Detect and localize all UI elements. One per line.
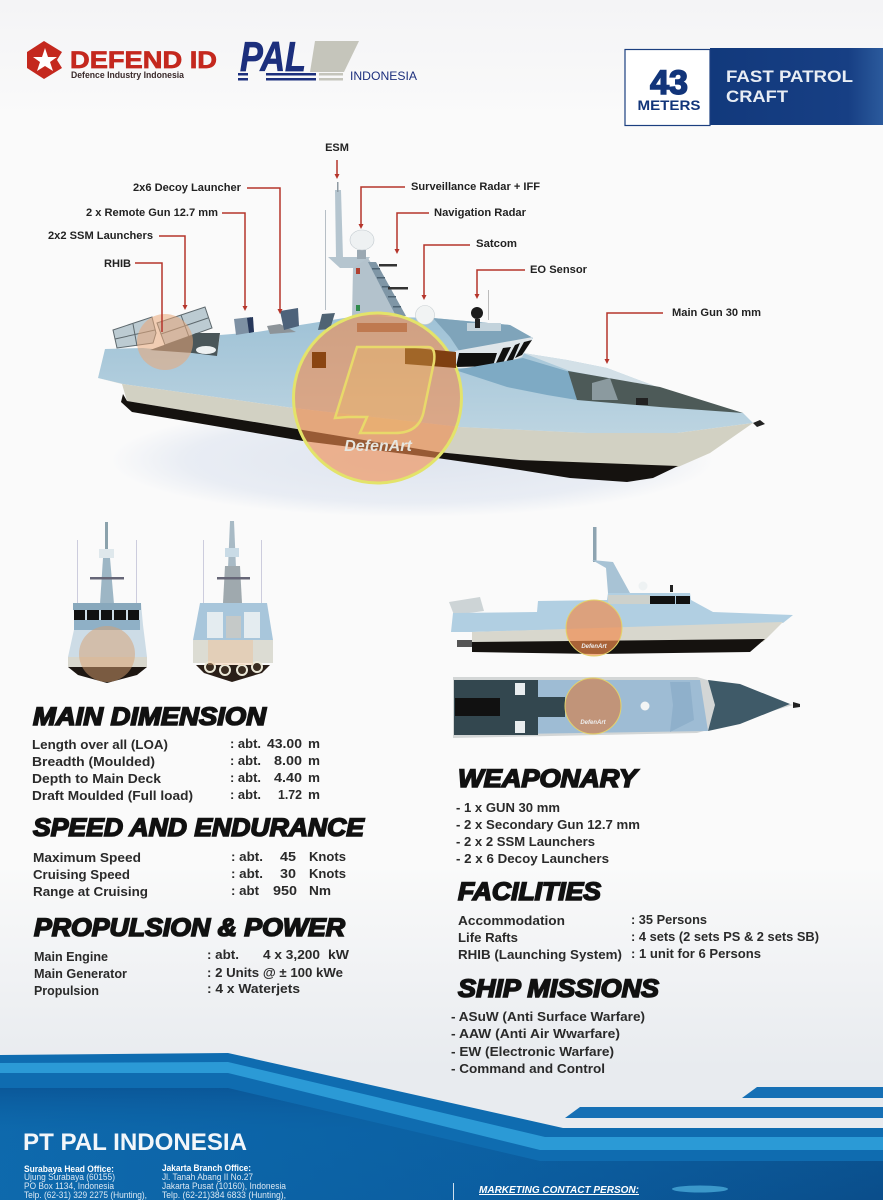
callout: SSM launchers: [48, 230, 188, 310]
facility rows: : 4 sets (2 sets PS & 2 sets SB): [631, 929, 819, 944]
speed rows: : abt: [231, 883, 260, 898]
callout: navigation radar: [394, 207, 527, 254]
dimension rows: [32, 736, 320, 803]
callout: decoy launcher: 2x6 Decoy Launcher: [133, 182, 242, 194]
speed rows: Range at Cruising: [33, 884, 148, 899]
watermark large: DefenArt: [344, 438, 412, 455]
Surabaya office: Telp. (62-31) 329 2275 (Hunting),: [24, 1190, 147, 1200]
heading: PROPULSION & POWER: [34, 914, 345, 942]
dimension rows: m: [308, 736, 320, 751]
bridge windows: [456, 340, 532, 367]
mission rows: - EW (Electronic Warfare): [451, 1044, 614, 1059]
panel: weaponary: [456, 765, 640, 866]
PAL logo lettering: PAL: [240, 33, 306, 80]
callout: main gun: Main Gun 30 mm: [672, 307, 761, 319]
stern RHIB: [196, 346, 216, 354]
dimension rows: : abt.: [230, 736, 261, 751]
propulsion rows: Propulsion: [34, 983, 99, 998]
side view ship: DefenArt: [581, 644, 608, 650]
callout: main gun: [604, 307, 761, 364]
watermark large: [294, 313, 462, 483]
badge number: 43: [650, 64, 688, 102]
dimension rows: 4.40: [274, 770, 302, 785]
callout: EO sensor: EO Sensor: [530, 264, 588, 276]
dimension rows: 1.72: [278, 787, 302, 802]
dimension rows: : abt.: [230, 770, 261, 785]
Jakarta office: [162, 1163, 286, 1200]
footer main panel: [0, 1088, 883, 1200]
footer shading: [0, 1088, 883, 1200]
dimension rows: : abt.: [230, 753, 261, 768]
hull grey band: [98, 378, 753, 467]
bulwark: [523, 353, 660, 388]
bow tip: [753, 420, 765, 427]
footer: [0, 1053, 883, 1200]
heading: SHIP MISSIONS: [458, 975, 659, 1003]
propulsion rows: kW: [328, 947, 350, 962]
Jakarta office: Jakarta Pusat (10160), Indonesia: [162, 1181, 286, 1191]
heading: MAIN DIMENSION: [33, 703, 267, 731]
speed rows: Knots: [309, 866, 346, 881]
stern well: [150, 333, 220, 356]
callout: ESM: [325, 142, 349, 179]
propulsion rows: 4 x 3,200: [263, 947, 320, 962]
callout: RHIB: RHIB: [104, 258, 131, 270]
badge navy panel: [710, 48, 883, 125]
badge title: CRAFT: [726, 87, 789, 106]
badge title: FAST PATROL: [726, 67, 853, 86]
header logos: [27, 33, 417, 83]
panel: main dimension: [32, 703, 320, 803]
radar dome: [350, 230, 374, 250]
top view ship: DefenArt: [580, 720, 607, 726]
EO sensor: [467, 290, 501, 331]
callout: remote gun: [86, 207, 248, 311]
watermark small stern: [137, 314, 193, 370]
speed rows: Nm: [309, 883, 331, 898]
bow main gun: [592, 378, 648, 405]
propulsion rows: Main Engine: [34, 949, 108, 964]
dimension rows: 8.00: [274, 753, 302, 768]
PAL logo grey ship bow: [310, 41, 359, 72]
Jakarta office: Telp. (62-21)384 6833 (Hunting),: [162, 1190, 286, 1200]
facility rows: : 35 Persons: [631, 912, 707, 927]
callout: surveillance radar: Surveillance Radar + IFF: [411, 181, 540, 193]
facility rows: Accommodation: [458, 913, 565, 928]
dimension rows: Breadth (Moulded): [32, 754, 155, 769]
mission rows: - AAW (Anti Air Wwarfare): [451, 1026, 620, 1041]
Jakarta office: Jakarta Branch Office:: [162, 1163, 251, 1173]
weapon rows: [456, 800, 640, 866]
stern launchers: [113, 307, 212, 348]
satcom dome: [416, 306, 434, 324]
weapon rows: - 2 x Secondary Gun 12.7 mm: [456, 817, 640, 832]
marketing contact heading: MARKETING CONTACT PERSON:: [479, 1185, 639, 1196]
weapon rows: - 1 x GUN 30 mm: [456, 800, 560, 815]
speed rows: Knots: [309, 849, 346, 864]
speed rows: 950: [273, 883, 297, 898]
weapon rows: - 2 x 2 SSM Launchers: [456, 834, 595, 849]
speed rows: Cruising Speed: [33, 867, 130, 882]
Surabaya office: Ujung Surabaya (60155): [24, 1172, 115, 1182]
rear view ship: [193, 521, 273, 682]
Jakarta office: Jl. Tanah Abang II No.27: [162, 1172, 253, 1182]
dimension rows: m: [308, 770, 320, 785]
propulsion rows: : 4 x Waterjets: [207, 981, 300, 996]
panel: ship missions: [451, 975, 659, 1076]
callout: satcom: Satcom: [476, 238, 517, 250]
propulsion rows: [34, 947, 350, 998]
callout: satcom: [422, 238, 517, 300]
dimension rows: Length over all (LOA): [32, 737, 168, 752]
bridge window frames: [455, 337, 533, 368]
hull black waterline: [121, 394, 678, 482]
speed rows: Maximum Speed: [33, 850, 141, 865]
heading: FACILITIES: [458, 878, 601, 906]
facility rows: [458, 912, 819, 962]
ship shadow: [110, 403, 714, 517]
front view ship: [68, 522, 147, 683]
icon: Defend ID star logo: [27, 41, 62, 79]
Surabaya office: PO Box 1134, Indonesia: [24, 1181, 114, 1191]
footer wave bands: [0, 1053, 883, 1200]
dimension rows: : abt.: [230, 787, 261, 802]
foredeck: [455, 358, 577, 400]
heading: WEAPONARY: [458, 765, 640, 793]
facility rows: : 1 unit for 6 Persons: [631, 946, 761, 961]
Defend ID wordmark: DEFEND ID: [70, 47, 217, 74]
panel: speed and endurance: [33, 814, 365, 899]
top view ship: [453, 677, 800, 738]
dimension rows: 43.00: [267, 736, 302, 751]
heading: SPEED AND ENDURANCE: [33, 814, 365, 842]
callout: EO sensor: [474, 264, 588, 299]
speed rows: [33, 849, 346, 899]
panel: facilities: [458, 878, 819, 962]
company name: PT PAL INDONESIA: [23, 1129, 247, 1156]
footer accent bars: [565, 1087, 883, 1118]
mission rows: - ASuW (Anti Surface Warfare): [451, 1009, 645, 1024]
propulsion rows: : abt.: [207, 947, 239, 962]
facility rows: Life Rafts: [458, 930, 518, 945]
remote guns and decoy launcher: [234, 308, 335, 335]
bridge wheelhouse roof: [433, 318, 533, 352]
callout: remote gun: 2 x Remote Gun 12.7 mm: [86, 207, 218, 219]
callouts: [48, 142, 761, 364]
PAL logo stripes: [238, 73, 343, 80]
speed rows: : abt.: [231, 866, 263, 881]
side view ship: [449, 527, 793, 656]
Defend ID tagline: Defence Industry Indonesia: [71, 70, 185, 81]
callout: decoy launcher: [133, 182, 282, 314]
dimension rows: m: [308, 753, 320, 768]
mission rows: - Command and Control: [451, 1061, 605, 1076]
hull upper side: [98, 316, 753, 433]
dimension rows: m: [308, 787, 320, 802]
speed rows: 45: [280, 849, 296, 864]
propulsion rows: Main Generator: [34, 966, 127, 981]
callout: RHIB: [104, 258, 162, 332]
PAL Indonesia text: INDONESIA: [350, 69, 417, 83]
mission rows: [451, 1009, 645, 1076]
Surabaya office: Surabaya Head Office:: [24, 1164, 114, 1174]
header badge: 43 meters fast patrol craft: [625, 48, 883, 126]
main ship illustration: [98, 182, 765, 517]
badge unit: METERS: [638, 97, 700, 113]
callout: navigation radar: Navigation Radar: [434, 207, 527, 219]
callout: SSM launchers: 2x2 SSM Launchers: [48, 230, 153, 242]
Surabaya office: [24, 1164, 147, 1200]
weapon rows: - 2 x 6 Decoy Launchers: [456, 851, 609, 866]
panel: propulsion and power: [34, 914, 350, 998]
callout: surveillance radar: [358, 181, 540, 229]
badge white box: [625, 50, 710, 126]
foredeck well: [568, 371, 743, 413]
mast: [325, 182, 408, 318]
facility rows: RHIB (Launching System): [458, 947, 622, 962]
dimension rows: Draft Moulded (Full load): [32, 788, 193, 803]
speed rows: 30: [280, 866, 296, 881]
propulsion rows: : 2 Units @ ± 100 kWe: [207, 965, 343, 980]
dimension rows: Depth to Main Deck: [32, 771, 162, 786]
speed rows: : abt.: [231, 849, 263, 864]
callout: ESM: ESM: [325, 142, 349, 154]
